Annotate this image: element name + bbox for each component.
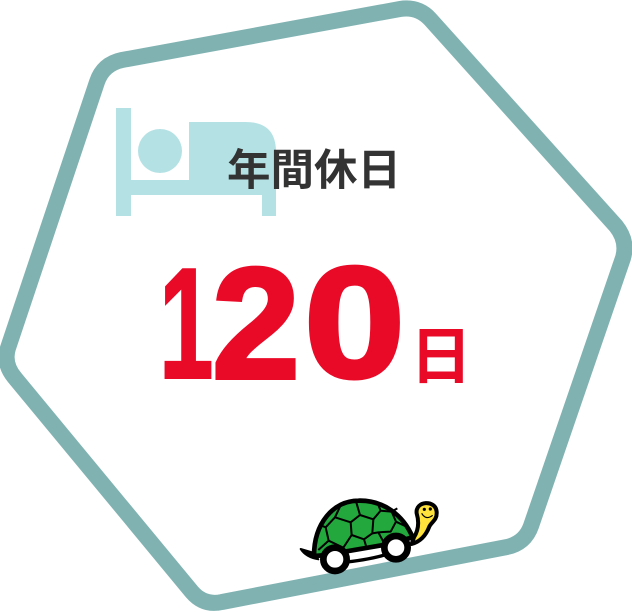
turtle shell (314, 501, 413, 556)
icon: turtle on wheels (301, 501, 437, 571)
turtle front wheel (384, 536, 408, 559)
turtle tail (301, 549, 318, 559)
icon: bed (116, 108, 276, 216)
turtle face (422, 508, 433, 518)
number: 120 days: 1 (159, 235, 213, 412)
turtle rear wheel (323, 548, 347, 571)
turtle body underside (330, 543, 390, 563)
number: 120 days: 日 (410, 323, 472, 392)
number: 120 days: 2 (212, 236, 300, 412)
heading: annual holidays: 年間休日 (227, 147, 401, 195)
number: 120 days: 0 (304, 235, 405, 411)
turtle neck and head (412, 503, 437, 544)
number: 120 days (159, 235, 472, 412)
turtle shell pattern (318, 501, 407, 553)
